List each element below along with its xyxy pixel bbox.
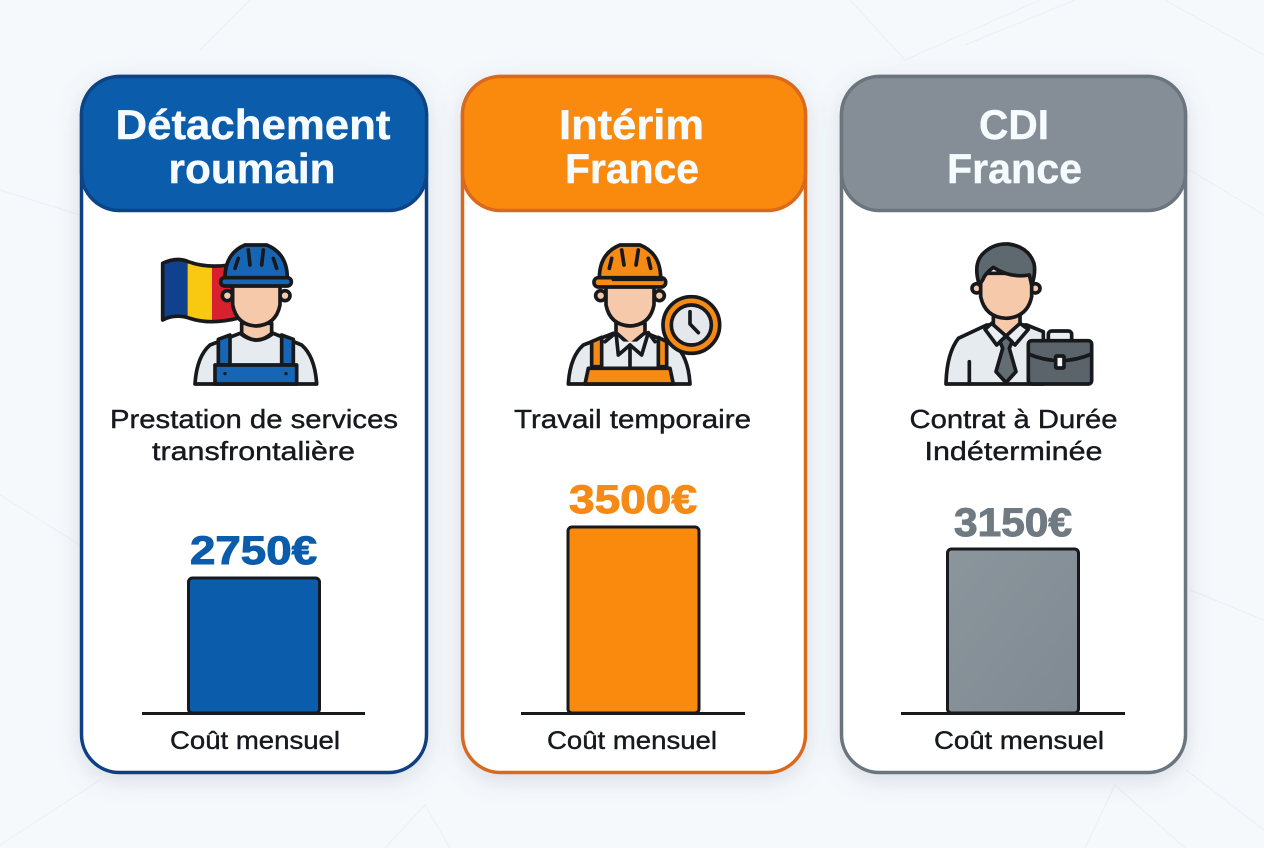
header: CDI France bbox=[842, 76, 1186, 210]
description: Prestation de services bbox=[110, 404, 398, 434]
bar chart: 3150€ bbox=[901, 501, 1125, 755]
bar chart: 3500€: Coût mensuel bbox=[547, 727, 717, 755]
bar chart: 3500€ bbox=[521, 478, 745, 755]
header: CDI France: France bbox=[947, 145, 1082, 192]
bar chart: 3150€: 3150€ bbox=[954, 501, 1072, 545]
bar chart: 2750€: 2750€ bbox=[190, 529, 317, 573]
description: transfrontalière bbox=[152, 436, 355, 466]
description bbox=[910, 404, 1118, 466]
description bbox=[110, 404, 398, 466]
bar chart: 2750€: Coût mensuel bbox=[170, 727, 340, 755]
icon: employee with briefcase bbox=[946, 244, 1092, 384]
header: Détachement roumain: roumain bbox=[168, 145, 336, 192]
bar chart: 2750€ bbox=[142, 529, 365, 755]
icon: Romanian worker with flag bbox=[163, 245, 317, 384]
header: Détachement roumain bbox=[82, 76, 426, 210]
header: Intérim France: Intérim bbox=[559, 101, 704, 148]
bar chart: 3500€: 3500€ bbox=[569, 478, 697, 522]
header: Intérim France bbox=[462, 76, 806, 210]
header: Intérim France: France bbox=[565, 145, 699, 192]
description: Contrat à Durée bbox=[910, 404, 1118, 434]
description: Indéterminée bbox=[924, 436, 1102, 466]
description: Travail temporaire bbox=[514, 404, 751, 434]
icon: temp worker with clock bbox=[568, 245, 720, 384]
panel: Détachement roumain bbox=[82, 76, 426, 772]
header: CDI France: CDI bbox=[979, 101, 1049, 148]
panel: CDI France bbox=[842, 76, 1186, 772]
header: Détachement roumain: Détachement bbox=[116, 101, 390, 148]
bar chart: 3150€: Coût mensuel bbox=[934, 727, 1104, 755]
panel: Intérim France bbox=[462, 76, 806, 772]
